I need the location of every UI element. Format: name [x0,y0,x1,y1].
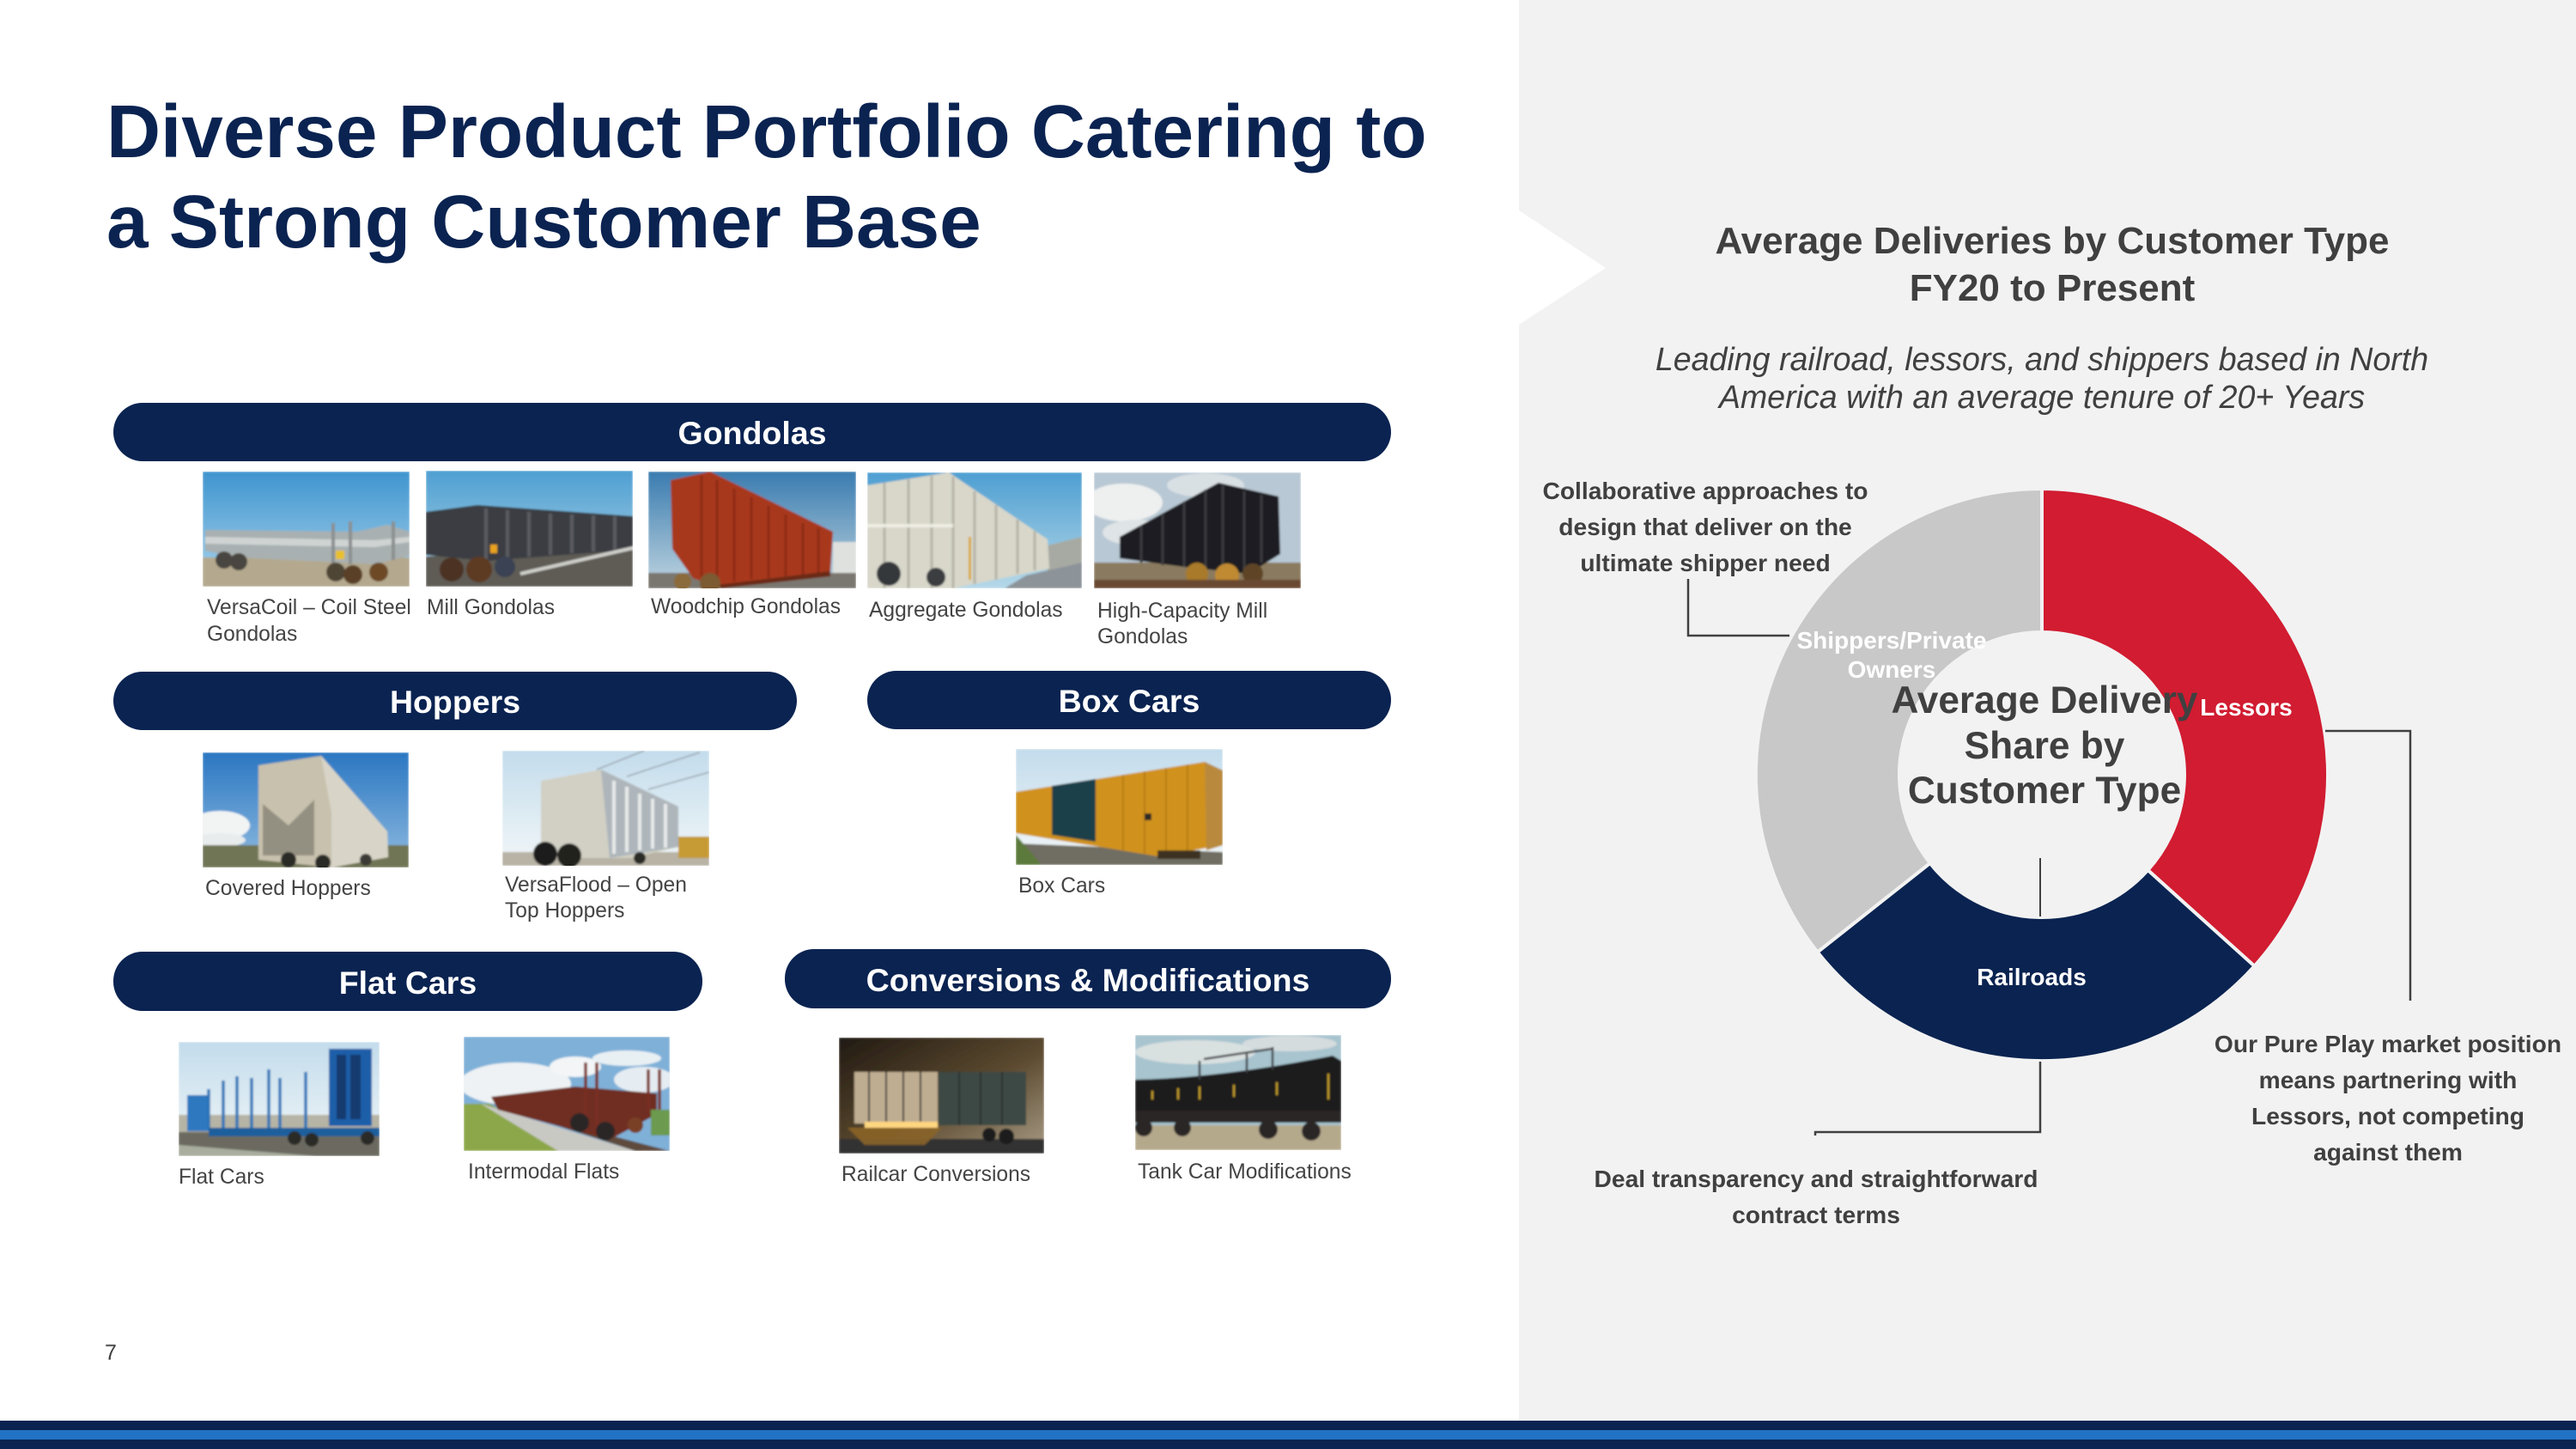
heading: Hoppers [113,672,797,730]
heading: Gondolas: Gondolas [678,415,826,451]
callout: Lessors: means partnering with [2259,1066,2517,1093]
photo: VersaCoil gondola [203,472,410,587]
caption: VersaFlood: VersaFlood – Open [505,874,687,897]
caption: VersaFlood: Top Hoppers [505,899,624,922]
chart subtitle: Leading railroad, lessors, and shippers based in North [1656,341,2428,377]
heading: Conversions and Modifications: Conversions & Modifications [866,962,1309,998]
photo: High-capacity mill gondola [1094,472,1301,588]
photo: Flat car [179,1042,380,1156]
chart subtitle: America with an average tenure of 20+ Years [1717,379,2365,415]
chart title: FY20 to Present [1910,267,2196,309]
segment: Lessors [2042,489,2328,966]
chart title: Average Deliveries by Customer Type [1716,220,2389,262]
footer band [0,1421,2576,1449]
photo: Aggregate gondola [867,472,1082,588]
donut centre label: Customer Type [1908,770,2181,812]
segment: Shippers/Private Owners [1756,489,2042,952]
caption: Railcar Conversions: Railcar Conversions [841,1163,1030,1186]
page number: 7 [105,1341,117,1365]
leader line: centre tick [2039,858,2041,916]
donut centre label: Share by [1965,725,2125,767]
caption: Intermodal Flats: Intermodal Flats [468,1160,619,1184]
photo: Covered hopper [203,752,409,868]
heading: Box Cars [867,671,1391,729]
panel: right grey background [1519,0,2576,1421]
caption: Box Cars: Box Cars [1018,874,1105,898]
caption: Woodchip Gondolas: Woodchip Gondolas [651,595,841,618]
photo: Mill gondola [426,471,633,587]
label: Lessors: Lessors [2200,694,2293,721]
photo: Box car [1016,749,1223,865]
caption: Flat Cars: Flat Cars [179,1166,264,1189]
leader line: Lessors [2325,731,2410,1001]
segment: Railroads [1818,863,2255,1061]
label: Shippers/Private Owners: Owners [1848,656,1935,683]
callout: Shippers: design that deliver on the [1558,513,1852,540]
title: a Strong Customer Base [106,180,981,264]
callout: Lessors: against them [2313,1138,2463,1166]
caption: VersaCoil: Gondolas [207,623,297,646]
photo: Intermodal flat [464,1037,670,1151]
callout: Railroads: contract terms [1732,1201,1900,1228]
leader line: Railroads [1815,1062,2040,1135]
leader line: Shippers [1688,579,1789,636]
caption: High-Capacity Mill Gondolas: Gondolas [1097,625,1188,648]
donut centre label: Average Delivery [1891,679,2198,721]
heading: Box Cars: Box Cars [1059,683,1200,719]
callout: Shippers: ultimate shipper need [1580,549,1831,576]
caption: High-Capacity Mill Gondolas: High-Capacity Mill [1097,600,1267,623]
label: Shippers/Private Owners: Shippers/Private [1797,627,1986,654]
photo: Railcar conversion [839,1038,1044,1154]
heading: Conversions and Modifications [785,949,1391,1008]
title: Diverse Product Portfolio Catering to [106,89,1427,174]
caption: Covered Hoppers: Covered Hoppers [205,877,371,900]
callout: Railroads: Deal transparency and straightforward [1595,1165,2038,1192]
title [106,89,1427,264]
heading: Flat Cars: Flat Cars [339,965,477,1001]
caption: Tank Car Modifications: Tank Car Modifications [1138,1160,1352,1184]
caption: VersaCoil: VersaCoil – Coil Steel [207,596,411,619]
callout: Lessors: Lessors, not competing [2251,1102,2524,1129]
donut chart [1756,489,2328,1061]
heading: Hoppers: Hoppers [390,684,520,720]
caption: Mill Gondolas: Mill Gondolas [427,596,555,619]
heading: Gondolas [113,403,1391,461]
label: Railroads: Railroads [1977,964,2087,990]
caption: Aggregate Gondolas: Aggregate Gondolas [869,599,1063,622]
heading: Flat Cars [113,952,702,1011]
callout: Shippers: Collaborative approaches to [1542,477,1868,504]
photo: VersaFlood hopper [502,751,709,866]
photo: Woodchip gondola [648,472,856,588]
photo: Tank car modification [1135,1035,1341,1150]
callout: Lessors: Our Pure Play market position [2215,1030,2561,1057]
